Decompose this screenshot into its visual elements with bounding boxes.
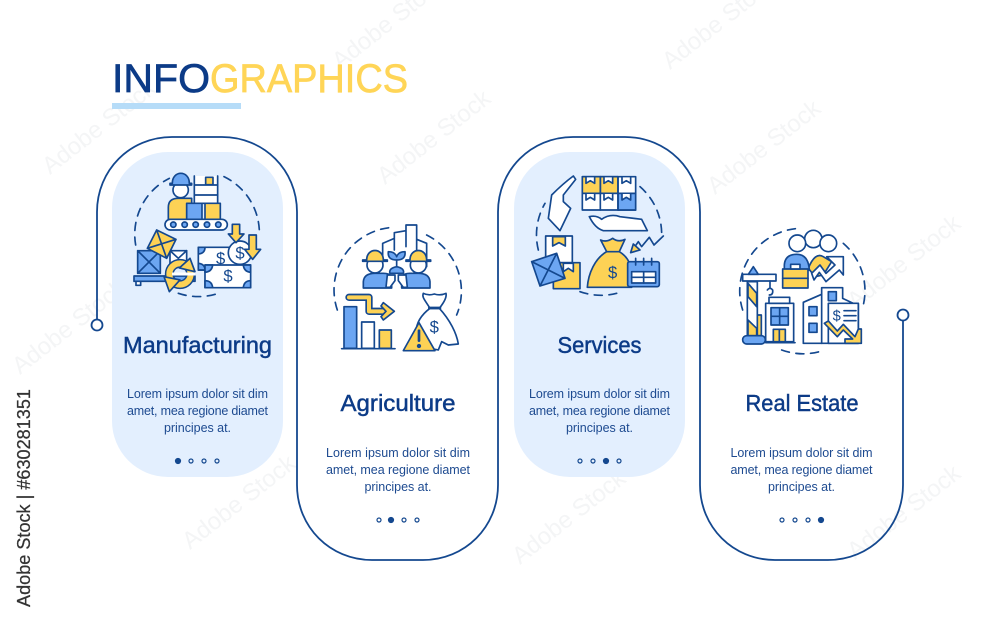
body text: amet, mea regione diamet [326, 463, 471, 477]
connecting outline [92, 137, 908, 560]
icon: agriculture: $ [430, 318, 439, 337]
body text: amet, mea regione diamet [730, 463, 873, 477]
icon: manufacturing: $ [223, 267, 233, 286]
body text [127, 387, 269, 435]
panel: agriculture [326, 225, 471, 522]
body text: amet, mea regione diamet [127, 404, 269, 418]
body text: principes at. [566, 421, 633, 435]
text: Adobe Stock [507, 464, 632, 570]
text: Adobe Stock [842, 459, 967, 565]
icon: services [532, 176, 663, 295]
panel background: manufacturing [112, 152, 283, 477]
icon: services: $ [608, 263, 617, 282]
text: Adobe Stock [702, 94, 827, 200]
progress dots [578, 458, 621, 464]
text: Adobe Stock [372, 84, 497, 190]
body text: Lorem ipsum dolor sit dim [127, 387, 268, 401]
stock credit: Adobe Stock | #630281351 [13, 389, 34, 607]
icon: real estate [740, 228, 865, 354]
progress dots [176, 458, 219, 464]
heading: Services [558, 332, 642, 358]
panel: real estate [730, 228, 873, 522]
icon: manufacturing: $ [216, 249, 225, 268]
title [112, 57, 408, 109]
body text: Lorem ipsum dolor sit dim [529, 387, 670, 401]
text: Adobe Stock [177, 449, 302, 555]
text: Adobe Stock [7, 274, 132, 380]
icon: agriculture [334, 225, 461, 351]
body text: principes at. [364, 480, 432, 494]
heading: Manufacturing [123, 332, 272, 358]
progress dots [377, 518, 419, 522]
progress dots [780, 518, 824, 522]
title: GRAPHICS [210, 57, 408, 101]
text: Adobe Stock [37, 74, 162, 180]
icon: manufacturing: $ [235, 244, 245, 263]
icon: manufacturing [134, 173, 261, 297]
body text: Lorem ipsum dolor sit dim [730, 446, 872, 460]
panel background: services [514, 152, 685, 477]
text: Adobe Stock [842, 209, 967, 315]
panel: manufacturing [123, 173, 272, 464]
body text [730, 446, 873, 494]
body text: Lorem ipsum dolor sit dim [326, 446, 470, 460]
body text [529, 387, 671, 435]
title: INFO [112, 57, 210, 101]
heading: Real Estate [746, 390, 858, 416]
panel: services [529, 176, 671, 463]
body text: principes at. [768, 480, 835, 494]
body text [326, 446, 471, 494]
body text: amet, mea regione diamet [529, 404, 671, 418]
heading: Agriculture [340, 390, 456, 416]
icon: real estate: $ [833, 309, 841, 325]
body text: principes at. [164, 421, 231, 435]
